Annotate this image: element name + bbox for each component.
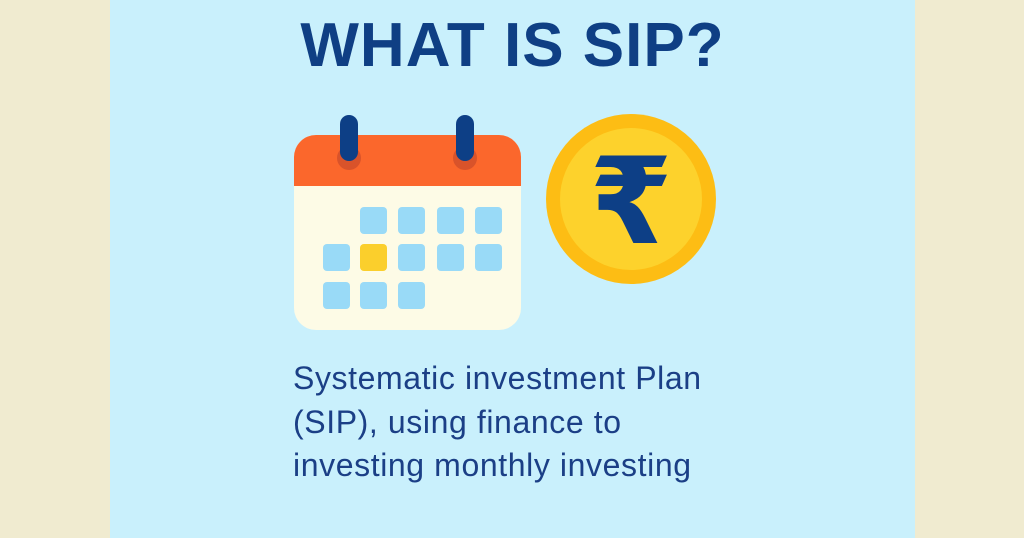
panel: main	[110, 0, 915, 538]
text block: description	[293, 360, 702, 483]
icon: rupee coin: ₹	[589, 133, 673, 272]
text block: description: Systematic investment Plan	[293, 360, 702, 396]
icon: rupee coin	[546, 114, 716, 284]
text block: description: investing monthly investing	[293, 447, 692, 483]
title: WHAT IS SIP?	[300, 11, 725, 80]
text block: description: (SIP), using finance to	[293, 404, 622, 440]
